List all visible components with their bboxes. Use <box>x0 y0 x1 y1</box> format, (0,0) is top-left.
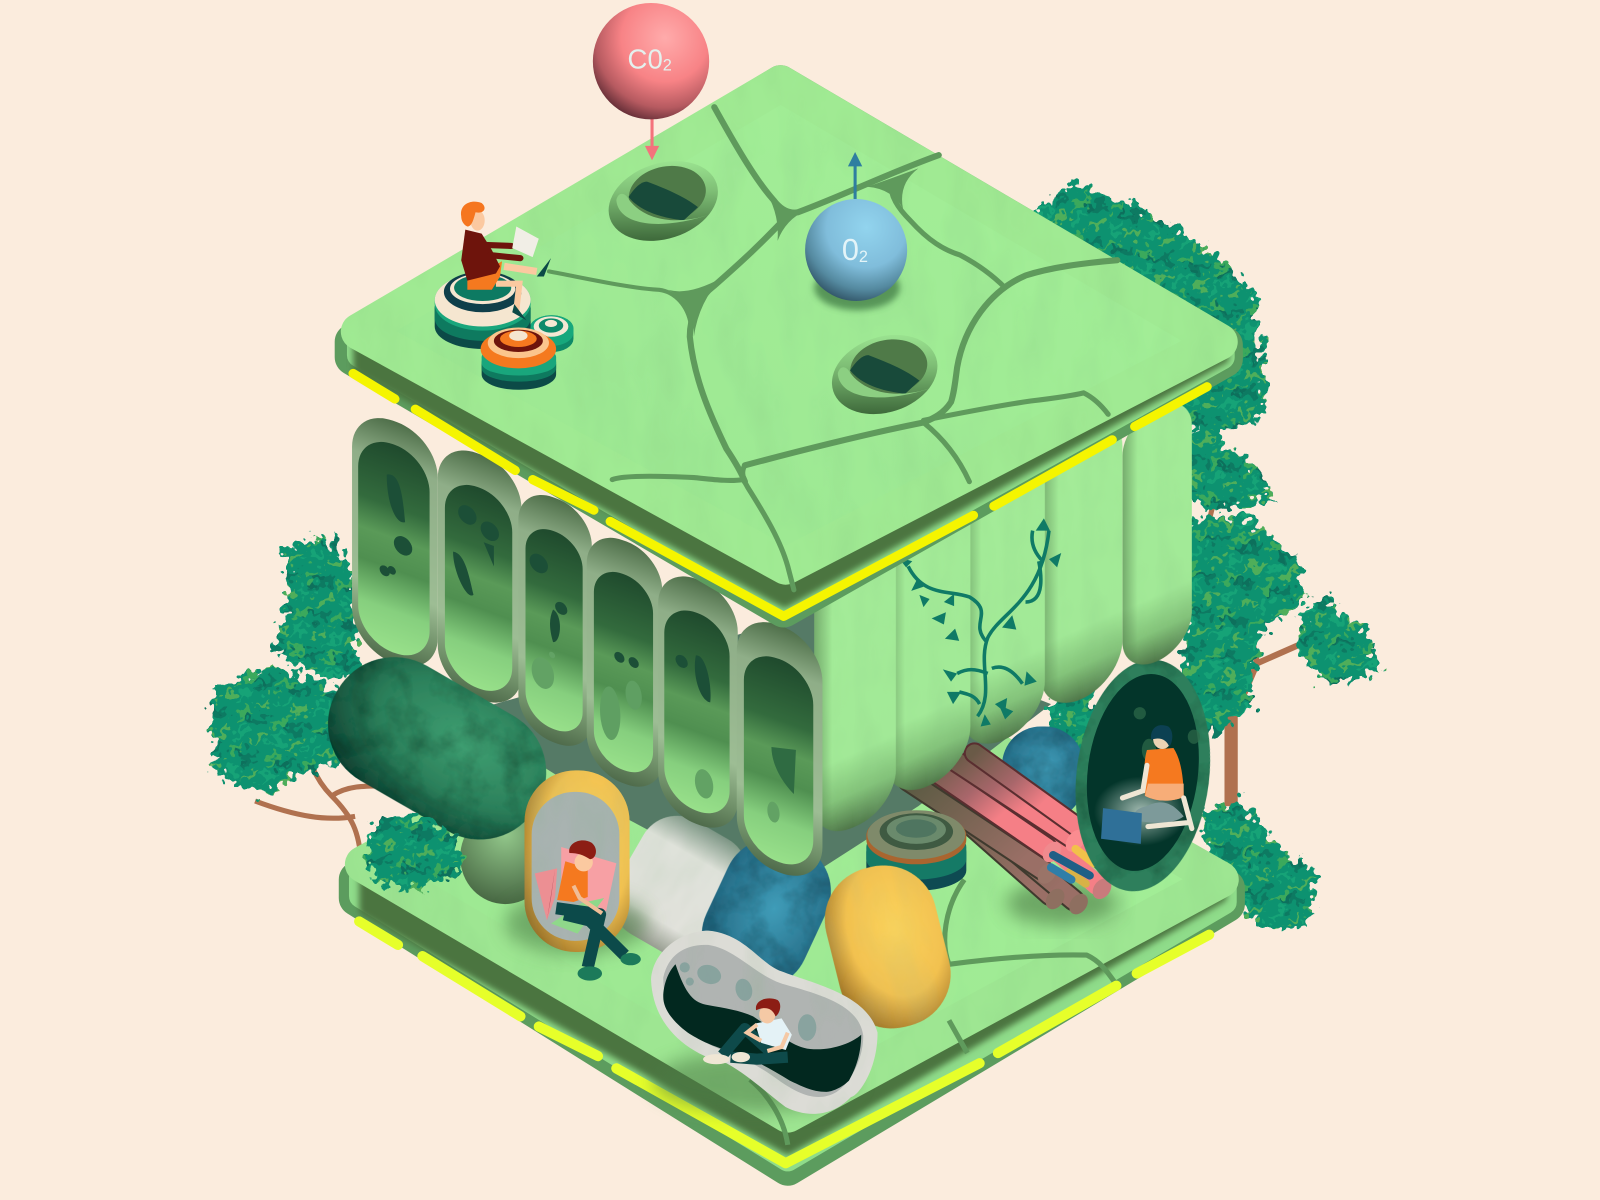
interior spots <box>1134 707 1200 761</box>
light glow <box>1094 777 1188 846</box>
grey bean-shaped cell <box>651 931 878 1114</box>
CO2 sphere: C0 <box>628 43 663 74</box>
bottom slab <box>357 633 1227 1167</box>
CO2 arrow <box>645 114 659 160</box>
large chloroplast-green cell with person <box>1063 652 1223 899</box>
rod core <box>1051 849 1094 884</box>
O2 sphere: 2 <box>859 248 868 266</box>
cell 5 <box>658 565 738 839</box>
vein junction wedges <box>668 168 918 337</box>
yellow capsule <box>814 854 962 1040</box>
cell 2 <box>438 439 521 714</box>
CO2 sphere: 2 <box>663 56 672 74</box>
bean dark interior <box>663 964 861 1092</box>
floor veins <box>750 880 1114 1145</box>
O2 sphere <box>805 199 907 301</box>
stacked disc on the floor <box>866 810 966 891</box>
small green capsule, rear left <box>460 810 550 904</box>
stoma opening 2 <box>822 322 948 427</box>
cell 6 <box>737 610 822 888</box>
stoma opening 1 <box>598 148 728 254</box>
CO2 sphere <box>593 3 709 119</box>
vine leaves <box>898 518 1061 727</box>
top slab rim <box>359 84 1222 602</box>
rod bundle <box>908 753 1121 918</box>
large striped stool <box>435 271 531 349</box>
slab rim <box>361 633 1224 1159</box>
trees behind right side <box>1036 184 1380 806</box>
top slab <box>353 82 1224 616</box>
cell 1 <box>352 406 438 679</box>
slab top surface <box>363 633 1220 1114</box>
small striped stool <box>530 315 573 352</box>
O2 shadow <box>814 265 900 310</box>
rod ends <box>1034 824 1121 918</box>
floor shadow under rods <box>1005 881 1117 926</box>
top slab shadow band <box>357 82 1224 604</box>
bean inner surface <box>663 945 863 1097</box>
slab shadow band <box>363 633 1222 1151</box>
person reading on stool <box>461 202 551 320</box>
white capsule <box>597 802 762 972</box>
yellow capsule with grey interior <box>505 770 648 954</box>
blue blob behind rods <box>1002 727 1084 820</box>
yellow light strips, top slab <box>353 373 1207 616</box>
O2 sphere: 0 <box>842 233 859 267</box>
tree on the left <box>210 536 393 862</box>
person on pillows <box>535 840 641 981</box>
cell 4 <box>587 527 662 797</box>
cell 3 <box>518 485 592 756</box>
person with laptop <box>1101 725 1192 844</box>
yellow light strips, bottom slab <box>359 921 1209 1163</box>
cut-open palisade cells, left face <box>352 406 822 888</box>
slab outer edge <box>357 633 1227 1167</box>
bottom-right bush <box>1199 801 1318 929</box>
orange striped stool <box>481 328 556 390</box>
foliage seen through the gap <box>1051 673 1097 755</box>
leaf cell veins <box>549 107 1117 590</box>
top surface <box>359 84 1219 566</box>
climbing vine <box>908 531 1049 716</box>
small bush on floor <box>369 813 461 893</box>
top slab outer edge <box>353 84 1224 609</box>
bean spots <box>680 962 816 1041</box>
right-facing palisade cells <box>814 391 1192 845</box>
blue capsule <box>685 821 848 1005</box>
interior shade behind cells <box>459 612 1051 898</box>
grey interior <box>532 792 619 941</box>
O2 arrow <box>848 152 862 199</box>
cell dark interior <box>1076 667 1210 877</box>
dark green chloroplast capsule <box>304 633 570 863</box>
person sitting on bean <box>703 998 792 1064</box>
